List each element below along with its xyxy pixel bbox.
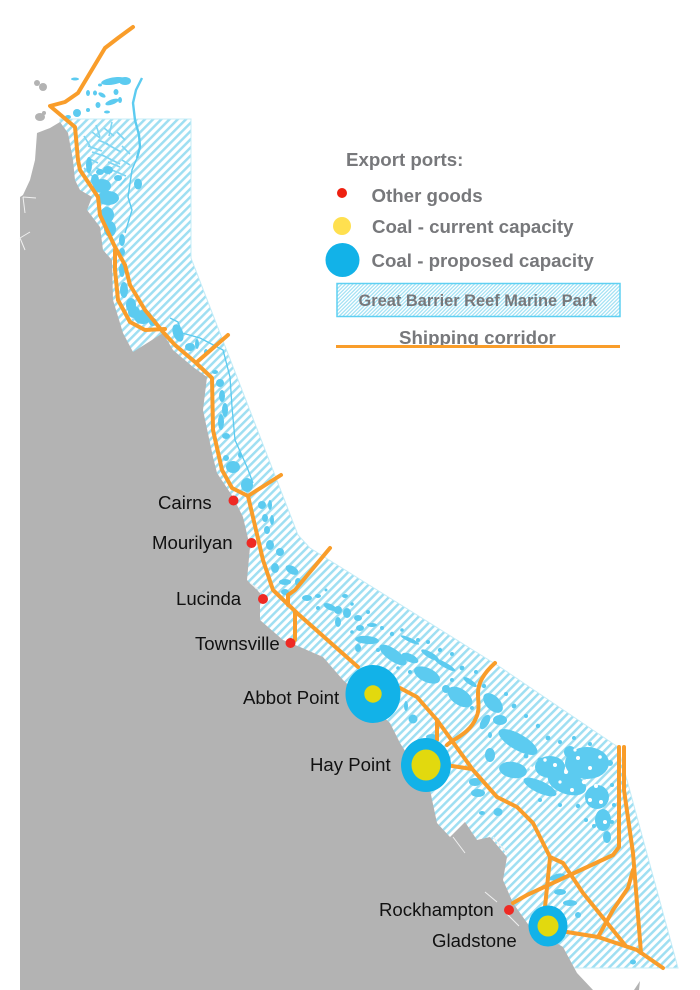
legend: other goods: Other goods	[372, 185, 483, 206]
legend	[326, 149, 620, 348]
port labels: Hay Point	[310, 754, 391, 775]
port: Abbot Point	[346, 665, 400, 723]
legend: coal proposed capacity: Coal - proposed capacity	[372, 250, 594, 271]
port labels: Lucinda	[176, 588, 242, 609]
port: Hay Point	[401, 738, 451, 792]
port labels: Cairns	[158, 492, 212, 513]
port labels: Townsville	[195, 633, 280, 654]
port labels	[152, 492, 517, 951]
port labels: Rockhampton	[379, 899, 494, 920]
port labels: Abbot Point	[243, 687, 340, 708]
map: coral reefs	[65, 75, 636, 964]
map: Great Barrier Reef Marine Park hatched area	[60, 119, 678, 968]
port labels: Gladstone	[432, 930, 517, 951]
legend: shipping corridor	[336, 327, 620, 348]
legend: marine park swatch: Great Barrier Reef Marine Park	[358, 292, 598, 310]
extra scattered reef speckles	[316, 588, 616, 828]
legend: marine park swatch	[337, 284, 620, 316]
legend: shipping corridor: Shipping corridor	[399, 327, 556, 348]
legend: coal current capacity: Coal - current capacity	[372, 216, 574, 237]
legend heading: Export ports:	[346, 149, 463, 170]
ports: other goods red dots	[228, 496, 514, 915]
port: Gladstone	[528, 906, 568, 946]
port labels: Mourilyan	[152, 532, 233, 553]
legend: coal proposed capacity	[326, 243, 594, 277]
